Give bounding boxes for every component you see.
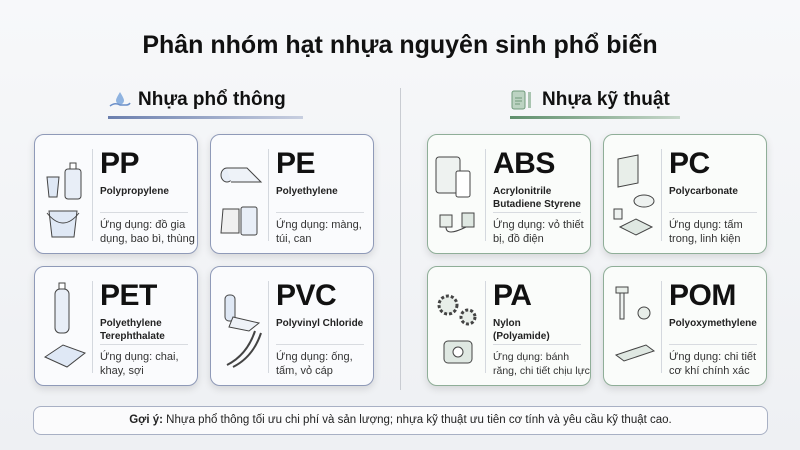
card: PE: Polyethylene [276, 186, 338, 197]
card: PP: Ứng dụng: đồ gia [100, 219, 185, 231]
icon: devices plug [436, 156, 474, 232]
card: PA: PA [493, 279, 531, 312]
heading: nhựa kỹ thuật [510, 89, 680, 119]
icon: screws parts [615, 286, 655, 362]
footer tip: Gợi ý: Nhựa phổ thông tối ưu chi phí và sản lượng; nhựa kỹ thuật ưu tiên cơ tính và yêu cầu kỹ thuật cao. [129, 414, 672, 426]
card: ABS: Acrylonitrile [493, 186, 551, 197]
card: PE [210, 134, 374, 254]
card: POM: Ứng dụng: chi tiết [669, 351, 756, 363]
card: ABS: Butadiene Styrene [493, 199, 581, 210]
card: ABS: ABS [493, 147, 555, 180]
card: POM: Polyoxymethylene [669, 318, 757, 329]
title: Phân nhóm hạt nhựa nguyên sinh phổ biến [142, 31, 658, 59]
icon: roll bag can [220, 168, 262, 236]
card: PC [603, 134, 767, 254]
card: PP: Polypropylene [100, 186, 169, 197]
icon: bottle tray [44, 282, 86, 368]
card: POM [603, 266, 767, 386]
card: PET: PET [100, 279, 157, 312]
card: ABS [427, 134, 591, 254]
card: PP: PP [100, 147, 139, 180]
card: PVC: PVC [276, 279, 336, 312]
card: ABS: Ứng dụng: vỏ thiết [493, 219, 584, 231]
card: PA: Ứng dụng: bánh [493, 351, 569, 363]
card: PET: Terephthalate [100, 331, 165, 342]
card: PA: răng, chi tiết chịu lực [493, 365, 590, 377]
icon: document [512, 90, 531, 110]
card: PP [34, 134, 198, 254]
card: PC: Polycarbonate [669, 186, 738, 197]
heading: nhựa phổ thông: Nhựa phổ thông [138, 89, 286, 110]
card: POM: POM [669, 279, 736, 312]
card: ABS: bị, đồ điện [493, 233, 544, 245]
card: PET: khay, sợi [100, 365, 144, 377]
center divider [400, 88, 401, 390]
card: PC: Ứng dụng: tấm [669, 219, 743, 231]
card: PVC: Polyvinyl Chloride [276, 318, 363, 329]
card: PET [34, 266, 198, 386]
card: PA [427, 266, 591, 386]
icon: cup bottle bucket [46, 162, 82, 238]
icon: gears bushing [438, 294, 476, 364]
footer tip [33, 406, 768, 435]
card: PET: Polyethylene [100, 318, 162, 329]
heading: nhựa phổ thông [108, 89, 303, 119]
card: PVC: tấm, vỏ cáp [276, 365, 333, 377]
card: PVC: Ứng dụng: ống, [276, 351, 353, 363]
icon: sheet lens chip [614, 154, 654, 236]
icon: pipe cable [224, 294, 262, 368]
card: PA: Nylon [493, 318, 521, 329]
heading: nhựa kỹ thuật: Nhựa kỹ thuật [542, 89, 670, 110]
card: PA: (Polyamide) [493, 331, 550, 342]
card: PVC [210, 266, 374, 386]
card: PE: PE [276, 147, 315, 180]
card: PE: túi, can [276, 233, 311, 245]
icon: hand drop [110, 92, 131, 106]
card: PP: dụng, bao bì, thùng [100, 233, 195, 245]
card: PE: Ứng dụng: màng, [276, 219, 362, 231]
card: PC: PC [669, 147, 710, 180]
card: PC: trong, linh kiện [669, 233, 741, 245]
card: PET: Ứng dụng: chai, [100, 351, 179, 363]
card: POM: cơ khí chính xác [669, 365, 750, 377]
